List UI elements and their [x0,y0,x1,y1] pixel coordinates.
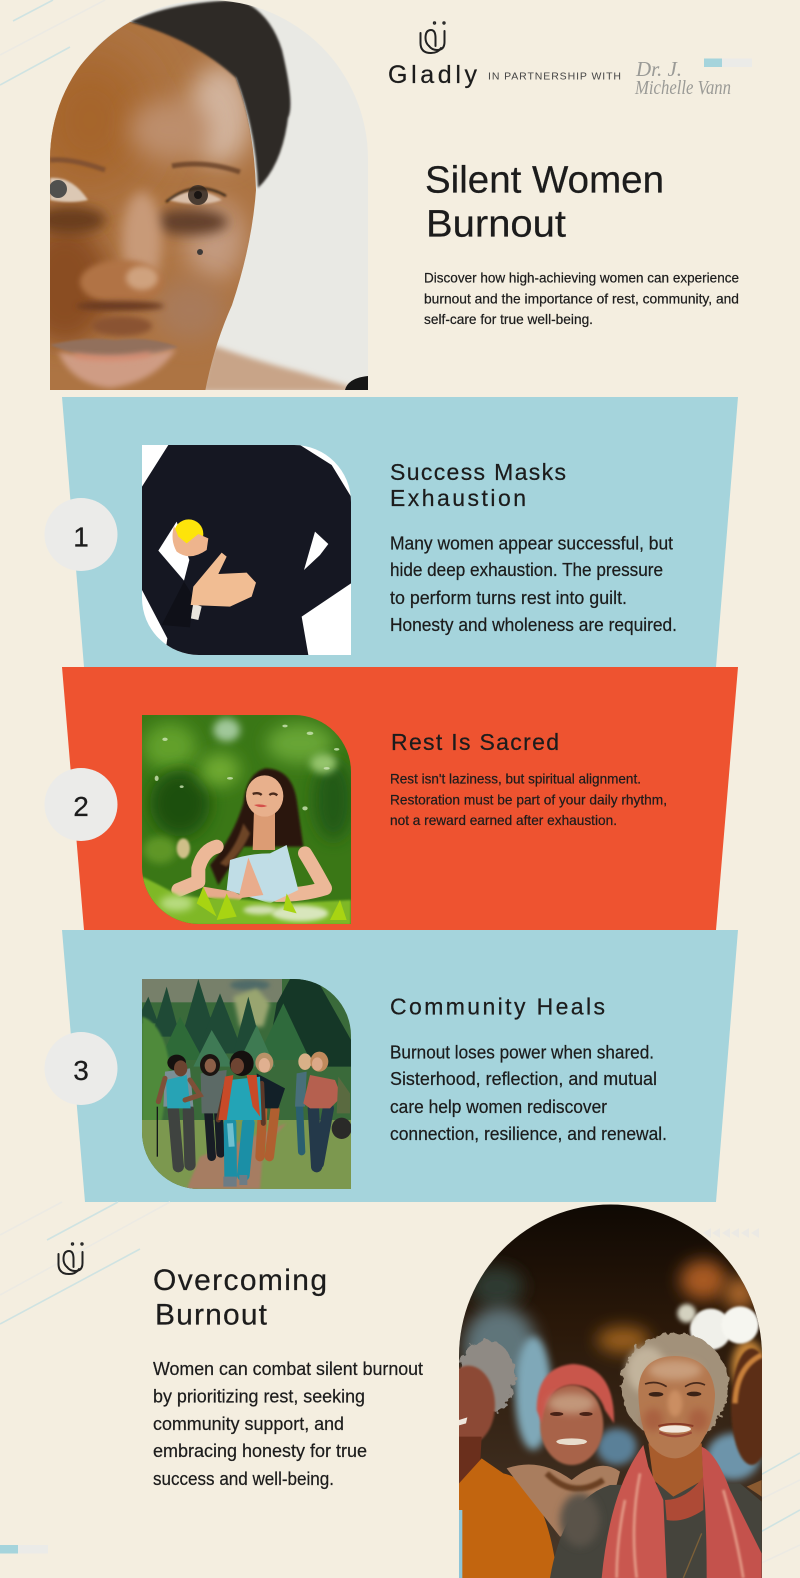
body text: care help women rediscover [390,1097,607,1117]
brand header [388,22,731,99]
body text [390,1042,667,1144]
photo: women hiking in forest [142,979,352,1189]
signature: Michelle Vann [634,77,731,99]
hiker 2 [208,1110,221,1157]
hiker 4 [260,1110,275,1157]
logo wordmark: Gladly [388,61,478,89]
decorative lines: bottom right [755,1453,800,1566]
signature: Dr. J. [635,57,682,81]
closing body text: by prioritizing rest, seeking [153,1386,365,1406]
intro text: self-care for true well-being. [424,311,593,327]
hero photo: woman's face close-up in arch [20,0,368,392]
photo: suit with stress ball [142,445,351,655]
heading [390,459,566,511]
body text: Rest isn't laziness, but spiritual alignment. [390,770,641,786]
closing body text: Women can combat silent burnout [153,1359,423,1379]
intro text: burnout and the importance of rest, community, and [424,290,739,306]
decorative arrows behind arch [703,1228,759,1238]
decorative bar: bottom left [0,1545,48,1554]
panel 1 background [62,397,738,667]
heading: Success Masks [390,459,566,485]
hiker 6 [313,1108,328,1167]
heading: Rest Is Sacred [391,729,559,755]
closing body text: success and well-being. [153,1469,334,1489]
hiker 3: center [230,1123,248,1177]
body text: connection, resilience, and renewal. [390,1124,667,1144]
icon: Gladly logo mark, lower [58,1243,83,1274]
number badge 1: 1 [73,522,89,552]
body text: hide deep exhaustion. The pressure [390,560,663,580]
closing body text [153,1359,423,1489]
hiker 1 [173,1110,190,1167]
signature [634,57,731,99]
body text: Honesty and wholeness are required. [390,615,677,635]
right edge woman [730,1347,762,1466]
decorative lines: top left [0,0,105,85]
number badge 3: 3 [73,1055,89,1086]
closing body text: embracing honesty for true [153,1441,367,1461]
number badge 1 [44,498,118,571]
hiker figures [157,1051,352,1187]
title: Silent Women [425,160,664,202]
decorative lines: bottom left [0,1202,170,1324]
title [425,160,664,246]
hiker 5 [299,1103,302,1152]
decorative bar: top right [704,58,752,67]
body text: to perform turns rest into guilt. [390,588,627,608]
icon: Gladly logo mark [420,22,445,53]
body text: Restoration must be part of your daily rhythm, [390,792,667,808]
title: Burnout [426,204,566,246]
closing body text: community support, and [153,1414,344,1434]
number badge 2: 2 [73,791,89,822]
closing heading: Burnout [155,1298,268,1332]
number badge 3 [44,1032,118,1105]
main woman [550,1483,762,1578]
body text [390,770,667,828]
body text: Many women appear successful, but [390,534,673,554]
intro text [424,270,739,327]
panel 1: success masks exhaustion [44,397,738,667]
partnership label: IN PARTNERSHIP WITH [488,70,621,82]
body text: not a reward earned after exhaustion. [390,812,617,828]
closing heading [153,1264,327,1332]
intro text: Discover how high-achieving women can experience [424,270,739,286]
panel 3: community heals [44,930,738,1202]
middle woman [507,1464,620,1537]
panel 3 background [62,930,738,1202]
number badge 2 [44,768,118,841]
left woman [458,1340,515,1413]
panel 2: rest is sacred [44,667,738,930]
closing photo: smiling older women in arch [459,1204,762,1578]
body text: Sisterhood, reflection, and mutual [390,1069,657,1089]
heading: Exhaustion [390,485,526,511]
closing heading: Overcoming [153,1264,327,1297]
panel 2 background [62,667,738,930]
body text [390,534,677,635]
photo: woman meditating in greenery [142,715,353,925]
heading: Community Heals [390,994,605,1020]
body text: Burnout loses power when shared. [390,1042,654,1062]
